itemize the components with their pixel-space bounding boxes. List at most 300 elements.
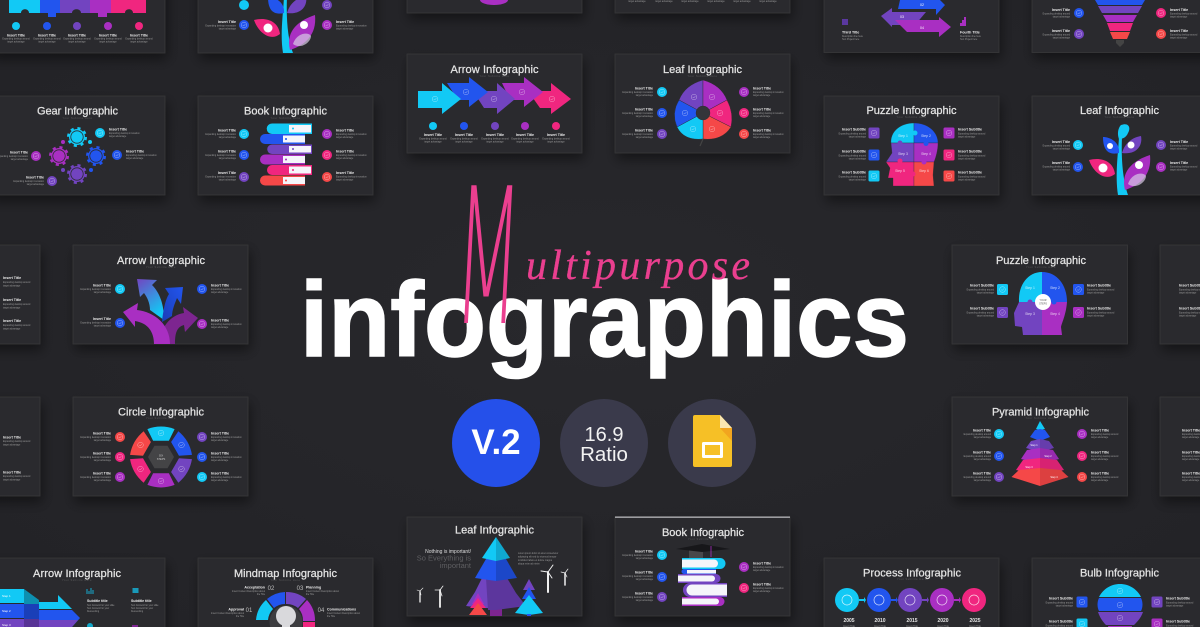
items: Expanding desktop innovation xyxy=(205,24,237,28)
items: Expanding desktop around xyxy=(958,154,986,158)
puzzle head: Step 4 xyxy=(921,152,931,156)
stacked arrows xyxy=(0,589,80,627)
puzzle head: Step 3 xyxy=(1025,312,1035,316)
items: target advantage xyxy=(336,178,354,182)
numbered labels: 02 xyxy=(268,586,275,592)
items: Insert Title xyxy=(635,570,653,574)
subtitle: Your Subtitle Here xyxy=(897,577,927,581)
items: Expanding desktop innovation xyxy=(753,112,784,115)
items xyxy=(1043,8,1198,40)
panel: arrows top right xyxy=(824,0,999,52)
subtitle: Your Subtitle Here xyxy=(146,265,176,269)
item row: Expanding desktop around xyxy=(63,38,91,40)
item row: target advantage xyxy=(68,40,86,44)
labels: Description line here xyxy=(960,35,982,38)
items: Expanding desktop innovation xyxy=(80,436,112,439)
items: Expanding desktop innovation xyxy=(753,587,784,590)
items: target advantage xyxy=(211,459,229,462)
items: Expanding desktop innovation xyxy=(126,154,157,157)
items: target advantage xyxy=(3,328,21,330)
badge: google slides xyxy=(668,399,756,487)
items: Expanding desktop around xyxy=(1170,34,1198,36)
panel: leaf infographic centre xyxy=(615,54,790,153)
text block left: Nothing is important/ xyxy=(425,549,472,555)
items: Expanding desktop around xyxy=(3,440,31,443)
items: Insert Title xyxy=(753,128,771,132)
items: Expanding desktop innovation xyxy=(622,596,654,599)
items: target advantage xyxy=(636,599,654,602)
twin arrows: 02 xyxy=(920,3,924,7)
items xyxy=(205,128,367,182)
items: Insert Title xyxy=(3,298,21,302)
items: target advantage xyxy=(219,136,237,139)
items: Insert Title xyxy=(1170,8,1188,12)
items: Insert Title xyxy=(211,452,229,456)
panel: puzzle infographic six steps xyxy=(824,96,999,195)
items: Insert Title xyxy=(753,582,771,586)
heading: Arrow Infographic xyxy=(450,64,539,76)
items: Expanding desktop around xyxy=(1043,34,1071,36)
items: Insert Title xyxy=(3,470,21,474)
items: target advantage xyxy=(849,136,867,138)
items: target advantage xyxy=(94,439,112,442)
items: Expanding desktop innovation xyxy=(336,176,367,178)
puzzle head: Step 1 xyxy=(1025,286,1035,290)
script title: Multipurpose xyxy=(450,147,750,368)
items: Insert Title xyxy=(336,20,354,24)
items: Insert Title xyxy=(336,171,354,175)
items: Insert Title xyxy=(93,452,111,456)
items: Insert Title xyxy=(211,318,229,322)
items: Expanding desktop innovation xyxy=(336,154,367,157)
labels xyxy=(842,30,982,41)
timeline: 2005 xyxy=(843,618,855,624)
items xyxy=(3,436,31,482)
heading: Pyramid Infographic xyxy=(992,406,1090,418)
items: Expanding desktop innovation xyxy=(211,476,242,479)
items: target advantage xyxy=(1053,168,1071,172)
item row: target advantage xyxy=(516,140,534,144)
items: target advantage xyxy=(1179,292,1197,294)
labels: Text Project here xyxy=(842,38,860,41)
timeline: 2020 xyxy=(937,618,949,624)
items: Insert Title xyxy=(336,128,354,132)
layered pyramid: Step 1 xyxy=(1030,444,1038,447)
heading: Arrow Infographic xyxy=(117,255,206,267)
layered pyramid xyxy=(1012,421,1068,486)
items: Insert Title xyxy=(93,472,111,476)
items: Expanding desktop around xyxy=(1043,12,1071,16)
item row: Insert Title xyxy=(130,34,148,38)
items: Insert Subtitle xyxy=(958,150,982,154)
gears xyxy=(50,128,104,182)
items: Insert Title xyxy=(3,436,21,440)
items: target advantage xyxy=(1087,314,1105,318)
items: target advantage xyxy=(1170,36,1188,40)
items: Expanding desktop around xyxy=(3,281,31,284)
labels: Description line here xyxy=(842,35,864,38)
items xyxy=(0,128,157,186)
subtitle: Your Subtitle Here xyxy=(1026,416,1056,420)
panel: funnel top right xyxy=(1032,0,1200,52)
items: Insert Title xyxy=(93,432,111,436)
items: Insert Title xyxy=(635,592,653,596)
twin arrows xyxy=(881,0,951,37)
items: Insert Title xyxy=(973,428,991,432)
items: Expanding desktop innovation xyxy=(336,24,367,28)
panel: book infographic graduation xyxy=(615,516,790,616)
numbered labels: 03 xyxy=(297,586,304,592)
items: Insert Subtitle xyxy=(958,128,982,132)
panel: right edge row 3 xyxy=(1160,245,1200,344)
subtitle: Your Subtitle Here xyxy=(480,74,510,78)
items: Expanding desktop around xyxy=(958,132,986,136)
items: Expanding desktop innovation xyxy=(622,112,654,115)
main title: infographics: infographics xyxy=(300,261,909,379)
panel: book infographic xyxy=(198,96,373,195)
items: Insert Title xyxy=(1182,450,1200,454)
numbered labels: the Title xyxy=(236,615,245,618)
heading: Book Infographic xyxy=(244,106,328,118)
item row: target advantage xyxy=(38,40,56,44)
subtitle blocks: Subtitle title xyxy=(87,599,108,603)
numbered labels: Approval xyxy=(228,608,244,612)
layered pyramid: Step 2 xyxy=(1044,455,1052,458)
item row: target advantage xyxy=(130,40,148,44)
timeline: 2015 xyxy=(906,618,918,624)
items: target advantage xyxy=(94,324,112,328)
panel: pyramid infographic xyxy=(952,397,1128,496)
panel: arrow infographic bottom left xyxy=(0,558,165,627)
items: Expanding desktop innovation xyxy=(211,456,242,459)
items: Expanding desktop around xyxy=(1091,476,1119,479)
items xyxy=(1046,596,1194,627)
items: target advantage xyxy=(636,136,654,139)
items: target advantage xyxy=(219,28,237,30)
numbered labels: the Title xyxy=(257,593,266,596)
panel: arrow infographic centre xyxy=(407,54,582,153)
items xyxy=(80,432,242,482)
puzzle head: YOUR xyxy=(1040,299,1047,302)
items: Insert Title xyxy=(26,176,44,180)
items: target advantage xyxy=(753,94,771,97)
items: target advantage xyxy=(219,157,237,160)
items xyxy=(205,0,367,30)
items: Insert Title xyxy=(635,128,653,132)
item row: target advantage xyxy=(486,140,504,144)
item row: Insert Title xyxy=(38,34,56,38)
badge: ratio: Ratio xyxy=(580,443,628,466)
brain half wheel xyxy=(256,592,315,627)
subtitle blocks: Text Content For your slide xyxy=(131,604,159,607)
item row: target advantage xyxy=(547,140,565,144)
items: target advantage xyxy=(11,158,29,161)
stacked arrows: Step 1 xyxy=(2,594,11,598)
items: Expanding desktop around xyxy=(964,455,992,458)
panel: left edge row 3 xyxy=(0,245,40,344)
items: target advantage xyxy=(977,292,995,294)
subtitle: Your Subtitle Here xyxy=(1026,265,1056,269)
numbered labels: the Title xyxy=(327,615,336,618)
heading: Bulb Infographic xyxy=(1080,568,1160,580)
magenta shape xyxy=(480,0,508,5)
twin arrows: 04 xyxy=(920,26,924,30)
items: Insert Subtitle xyxy=(1087,306,1111,310)
puzzle head: Step 3 xyxy=(898,152,908,156)
items: Insert Subtitle xyxy=(842,150,866,154)
item row: Expanding desktop around xyxy=(125,38,153,40)
items: Insert Title xyxy=(218,128,236,132)
items: target advantage xyxy=(94,291,112,294)
subtitle blocks: Subtitle title xyxy=(131,599,152,603)
items: target advantage xyxy=(1053,148,1071,150)
subtitle: Your Subtitle Here xyxy=(62,578,92,582)
items: Expanding desktop around xyxy=(1170,166,1198,168)
items: Expanding desktop innovation xyxy=(622,91,654,94)
subtitle blocks: Text Content For your xyxy=(131,607,153,610)
small text row: target advantage xyxy=(759,0,777,3)
items: Expanding desktop innovation xyxy=(622,133,654,136)
timeline: 2010 xyxy=(874,618,886,624)
panel: mindmap infographic xyxy=(198,558,373,627)
numbered labels: Insert Content Description about xyxy=(211,612,244,615)
items: Insert Title xyxy=(218,20,236,24)
item row: Insert Title xyxy=(516,133,534,137)
items: Expanding desktop innovation xyxy=(211,288,242,291)
panel: gear infographic xyxy=(0,96,165,195)
text block right: Lorem ipsum dolor sit amet consectetur xyxy=(518,552,558,555)
items: Expanding desktop around xyxy=(1170,144,1198,148)
items: Insert Title xyxy=(3,319,21,323)
numbered labels: 04 xyxy=(318,608,325,614)
items: Insert Title xyxy=(1182,472,1200,476)
item row: target advantage xyxy=(455,140,473,144)
items: Insert Subtitle xyxy=(1049,620,1073,624)
items: Insert Subtitle xyxy=(970,306,994,310)
panel: right edge row 4 xyxy=(1160,397,1200,496)
item row: Expanding desktop around xyxy=(542,138,570,140)
items: Expanding desktop around xyxy=(1166,602,1194,604)
layered pyramid: Step 4 xyxy=(1050,476,1058,479)
items: Expanding desktop innovation xyxy=(753,91,784,94)
item row: Expanding desktop around xyxy=(450,138,478,140)
heading: Leaf Infographic xyxy=(455,524,534,536)
item row: Insert Title xyxy=(7,34,25,38)
item row: Expanding desktop around xyxy=(481,138,509,140)
badge: ratio xyxy=(560,399,648,487)
hexagon ring: SIX xyxy=(159,454,163,458)
items: target advantage xyxy=(3,478,21,482)
item row: Insert Title xyxy=(486,133,504,137)
items: target advantage xyxy=(336,136,354,139)
item row: target advantage xyxy=(99,40,117,44)
labels: Third Title xyxy=(842,30,859,34)
numbered labels: Acceptation xyxy=(244,586,265,590)
panel: puzzle infographic four steps xyxy=(952,245,1128,344)
items: Insert Subtitle xyxy=(958,170,982,174)
items xyxy=(1179,284,1200,318)
heading: Mindmap Infographic xyxy=(234,568,338,580)
item row: Insert Title xyxy=(99,34,117,38)
subtitle: Your Subtitle Here xyxy=(271,116,301,120)
subtitle blocks: Descending xyxy=(87,611,100,613)
items: target advantage xyxy=(3,444,21,446)
heading: Book Infographic xyxy=(662,527,744,539)
hexagon ring xyxy=(128,427,194,487)
subtitle: Your Subtitle Here xyxy=(63,116,93,120)
item row: Expanding desktop around xyxy=(94,38,122,40)
puzzle head: Step 2 xyxy=(1050,286,1060,290)
script title: Multipurpose: M xyxy=(450,147,526,368)
items: target advantage xyxy=(1170,168,1188,172)
items: Expanding desktop around xyxy=(1043,144,1071,148)
items: target advantage xyxy=(1182,436,1200,439)
items: Insert Title xyxy=(10,150,28,154)
items: Insert Title xyxy=(211,472,229,476)
items: Expanding desktop around xyxy=(1091,455,1119,458)
labels: Fourth Title xyxy=(960,30,980,34)
items: target advantage xyxy=(1091,479,1109,482)
items: target advantage xyxy=(1091,458,1109,461)
panel: top centre right xyxy=(615,0,790,13)
items: target advantage xyxy=(3,284,21,288)
items: Expanding desktop around xyxy=(1087,312,1115,314)
numbered labels: the Title xyxy=(306,593,315,596)
subtitle: Your Subtitle Here xyxy=(271,578,301,582)
items: target advantage xyxy=(336,28,354,30)
items: Insert Title xyxy=(93,284,111,288)
items: Expanding desktop around xyxy=(1091,433,1119,436)
icon: slides document xyxy=(693,415,732,467)
items: target advantage xyxy=(1170,16,1188,18)
text block right: adipiscing elit sed do eiusmod tempor xyxy=(518,556,557,558)
items xyxy=(80,284,242,329)
items: target advantage xyxy=(1182,479,1200,482)
small text row: target advantage xyxy=(681,0,699,3)
numbered labels: Communications xyxy=(327,608,356,612)
heading: Puzzle Infographic xyxy=(996,255,1086,267)
items: Insert Title xyxy=(218,150,236,154)
items: target advantage xyxy=(974,436,992,439)
items: Insert Title xyxy=(753,86,771,90)
trees xyxy=(466,537,543,616)
leaf wheel xyxy=(674,80,732,139)
icon: wind turbines xyxy=(417,565,568,607)
item row: Expanding desktop around xyxy=(2,38,30,40)
items: target advantage xyxy=(1179,314,1197,318)
items: target advantage xyxy=(3,306,21,310)
items: Insert Title xyxy=(1182,428,1200,432)
book stack xyxy=(260,124,312,186)
items: target advantage xyxy=(336,157,354,160)
items: target advantage xyxy=(211,326,229,329)
numbered labels: Insert Content Description about xyxy=(327,612,360,615)
items: target advantage xyxy=(977,314,995,318)
heading: Gear Infographic xyxy=(37,106,118,118)
items: Insert Title xyxy=(753,108,771,112)
items: Expanding desktop around xyxy=(1087,288,1115,292)
puzzle head xyxy=(886,123,938,186)
items: Expanding desktop innovation xyxy=(211,323,242,326)
items: Insert Title xyxy=(1052,29,1070,33)
badge: version xyxy=(452,399,540,487)
heading: Circle Infographic xyxy=(118,406,204,418)
items: Expanding desktop around xyxy=(964,476,992,479)
items: Insert Title xyxy=(635,550,653,554)
item row xyxy=(2,22,153,44)
items: target advantage xyxy=(636,578,654,581)
items: Expanding desktop innovation xyxy=(109,132,140,135)
small text row xyxy=(628,0,777,3)
panel: bulb infographic xyxy=(1032,558,1200,627)
stem xyxy=(700,139,703,146)
items xyxy=(964,428,1119,482)
item row: Expanding desktop around xyxy=(511,138,539,140)
items: target advantage xyxy=(636,115,654,118)
items: Insert Title xyxy=(93,317,111,321)
heading: Arrow Infographic xyxy=(33,568,122,580)
item row: Insert Title xyxy=(547,133,565,137)
items: Insert Title xyxy=(211,432,229,436)
items: target advantage xyxy=(1182,458,1200,461)
items: target advantage xyxy=(958,158,976,160)
items: target advantage xyxy=(27,183,45,186)
items: Insert Title xyxy=(211,284,229,288)
items: Insert Subtitle xyxy=(970,284,994,288)
puzzle head: Step 2 xyxy=(921,134,931,138)
panel: leaf top xyxy=(198,0,373,53)
icon: third xyxy=(842,19,848,25)
heading: Puzzle Infographic xyxy=(866,105,957,117)
script title: Multipurpose: ultipurpose xyxy=(526,243,750,289)
items: Insert Title xyxy=(1052,161,1070,165)
subtitle blocks: Text Content For your slide xyxy=(87,604,115,607)
branching arrows xyxy=(123,279,198,344)
items: Expanding desktop around xyxy=(958,176,986,178)
items: Expanding desktop innovation xyxy=(336,133,367,136)
subtitle: Your Subtitle Here xyxy=(146,416,176,420)
subtitle: Your Subtitle Here xyxy=(688,74,718,78)
items: Insert Subtitle xyxy=(842,128,866,132)
items: Expanding desktop around xyxy=(839,176,867,178)
items: Insert Title xyxy=(336,150,354,154)
stacked arrows: Step 3 xyxy=(2,623,11,627)
items: target advantage xyxy=(211,439,229,442)
items: Insert Title xyxy=(1052,140,1070,144)
items: Expanding desktop around xyxy=(967,288,995,292)
text block left: important xyxy=(440,561,472,570)
items: target advantage xyxy=(1056,604,1074,608)
items: Expanding desktop innovation xyxy=(205,133,237,136)
small text row: target advantage xyxy=(733,0,751,3)
items: Expanding desktop around xyxy=(3,475,31,478)
items: Expanding desktop around xyxy=(839,154,867,158)
items: Insert Title xyxy=(635,108,653,112)
items: Insert Title xyxy=(973,450,991,454)
panel: process infographic xyxy=(824,558,999,627)
text block left xyxy=(417,549,472,570)
top highlight xyxy=(615,516,790,518)
items: target advantage xyxy=(958,178,976,182)
text block left: So Everything is xyxy=(417,554,471,562)
book stack xyxy=(678,558,727,606)
items: target advantage xyxy=(753,115,771,118)
text block right: incididunt labore et dolore magna xyxy=(518,559,553,562)
items: Expanding desktop innovation xyxy=(80,322,112,324)
item row: Expanding desktop around xyxy=(33,38,61,40)
items: Expanding desktop innovation xyxy=(753,133,784,136)
items: Expanding desktop around xyxy=(1043,166,1071,168)
